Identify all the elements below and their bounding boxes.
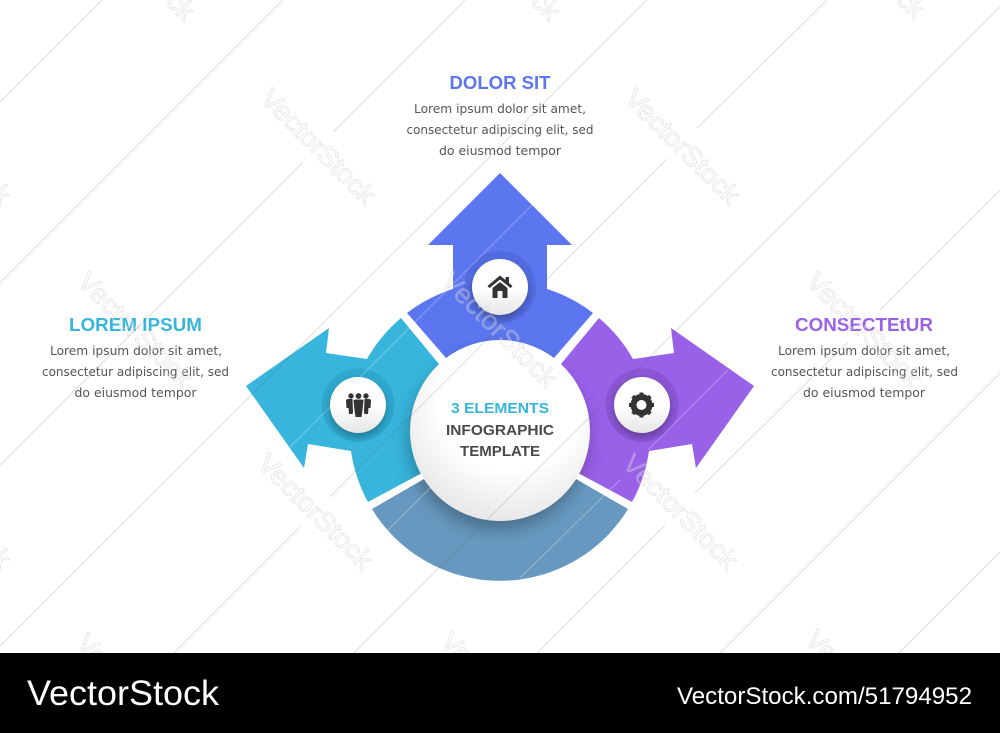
center title: INFOGRAPHIC [446,422,554,439]
watermark: VectorStock text: VectorStock [72,266,199,394]
center title: TEMPLATE [460,443,540,460]
watermark: VectorStock text: VectorStock [801,266,928,394]
watermark: VectorStock text: Ve [71,628,114,672]
text block: dolor sit: consectetur adipiscing elit, sed [406,123,594,137]
arrow: purple right [561,318,754,502]
text block: dolor sit: DOLOR SIT [450,73,551,93]
footer logo text: VectorStock [27,674,220,713]
watermark: VectorStock text: VectorStock [617,448,744,576]
icon: gear [606,368,678,442]
text block: consectetur [771,315,958,400]
watermark: VectorStock text: Ve [800,624,843,668]
segment: steel blue bottom arc [372,479,628,581]
text block: lorem ipsum: consectetur adipiscing elit, sed [42,365,229,379]
text block: consectetur: CONSECTEtUR [795,315,933,335]
watermark: VectorStock text: VectorStock [436,266,563,394]
watermark: VectorStock text: Ve [435,626,478,670]
text block: lorem ipsum [42,315,229,400]
text block: dolor sit [406,73,594,158]
center title [446,400,554,460]
icon: home [464,251,536,323]
text block: dolor sit: do eiusmod tempor [439,144,561,158]
footer url text: VectorStock.com/51794952 [677,683,972,710]
watermark: VectorStock text: VectorStock [252,448,379,576]
arrow: blue up [407,173,593,358]
center title: 3 ELEMENTS [451,400,549,417]
watermark: VectorStock text: VectorStock [255,83,382,211]
text block: lorem ipsum: LOREM IPSUM [69,315,202,335]
text block: consectetur: consectetur adipiscing elit, sed [771,365,958,379]
text block: dolor sit: Lorem ipsum dolor sit amet, [414,102,586,116]
center circle [408,341,590,530]
arrow: cyan left [246,318,439,502]
text block: consectetur: Lorem ipsum dolor sit amet, [778,344,950,358]
text block: lorem ipsum: do eiusmod tempor [74,386,197,400]
footer bar [0,653,1000,733]
watermark: VectorStock text: VectorStock [619,83,746,211]
text block: consectetur: do eiusmod tempor [803,386,925,400]
icon: people [322,368,394,442]
text block: lorem ipsum: Lorem ipsum dolor sit amet, [50,344,222,358]
